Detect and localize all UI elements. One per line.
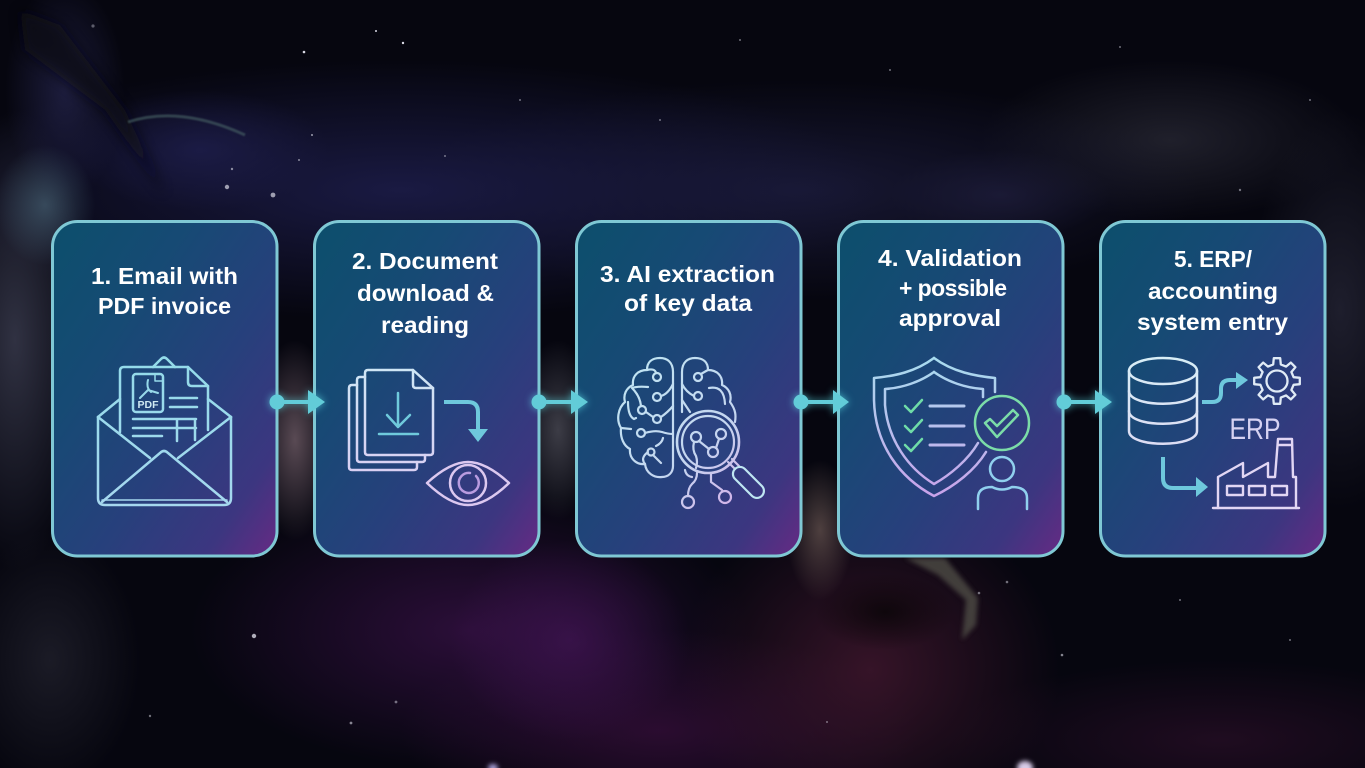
icon: envelope with PDF invoice: PDF xyxy=(138,399,159,411)
icon: green approval check xyxy=(975,396,1029,450)
heading: step 5: system entry xyxy=(1137,309,1288,335)
panel: step 5 ERP entry xyxy=(1100,222,1325,556)
icon: eye xyxy=(427,462,509,505)
heading: step 2 xyxy=(352,248,498,338)
heading: step 2: reading xyxy=(381,312,469,338)
heading: step 5 xyxy=(1137,246,1288,335)
panel: step 2 document download xyxy=(314,222,539,556)
label: ERP: ERP xyxy=(1230,413,1280,446)
connector arrow 2 to 3 xyxy=(532,390,588,414)
heading: step 3: 3. AI extraction xyxy=(600,261,775,287)
heading: step 1: PDF invoice xyxy=(98,293,231,319)
heading: step 5: 5. ERP/ xyxy=(1174,246,1253,272)
icon: documents with download arrow xyxy=(349,370,433,470)
icon: arrow to gear xyxy=(1202,372,1248,402)
heading: step 4: 4. Validation xyxy=(878,245,1022,271)
heading: step 2: download & xyxy=(357,280,494,306)
connector arrow 3 to 4 xyxy=(794,390,849,414)
icon: brain with magnifier xyxy=(618,358,767,508)
heading: step 3: of key data xyxy=(624,290,752,316)
icon: shield with checklist xyxy=(874,358,995,496)
heading: step 2: 2. Document xyxy=(352,248,498,274)
panel: step 4 validation xyxy=(838,222,1063,556)
icon: factory xyxy=(1213,439,1299,508)
icon: arrow to factory xyxy=(1163,457,1208,497)
heading: step 4: approval xyxy=(899,305,1001,331)
connector arrow 4 to 5 xyxy=(1056,390,1112,414)
icon: bent arrow xyxy=(444,402,488,442)
heading: step 4 xyxy=(878,245,1022,331)
heading: step 1 xyxy=(91,263,238,319)
heading: step 1: 1. Email with xyxy=(91,263,238,289)
heading: step 4: + possible xyxy=(899,275,1007,301)
heading: step 5: accounting xyxy=(1148,278,1278,304)
icon: gear xyxy=(1254,358,1300,404)
panel: step 1 email xyxy=(52,222,277,556)
panel: step 3 AI extraction xyxy=(576,222,801,556)
heading: step 3 xyxy=(600,261,775,316)
connector arrow 1 to 2 xyxy=(270,390,325,414)
icon: database xyxy=(1129,358,1197,444)
icon: envelope with PDF invoice xyxy=(98,358,231,505)
icon: person xyxy=(978,457,1027,509)
